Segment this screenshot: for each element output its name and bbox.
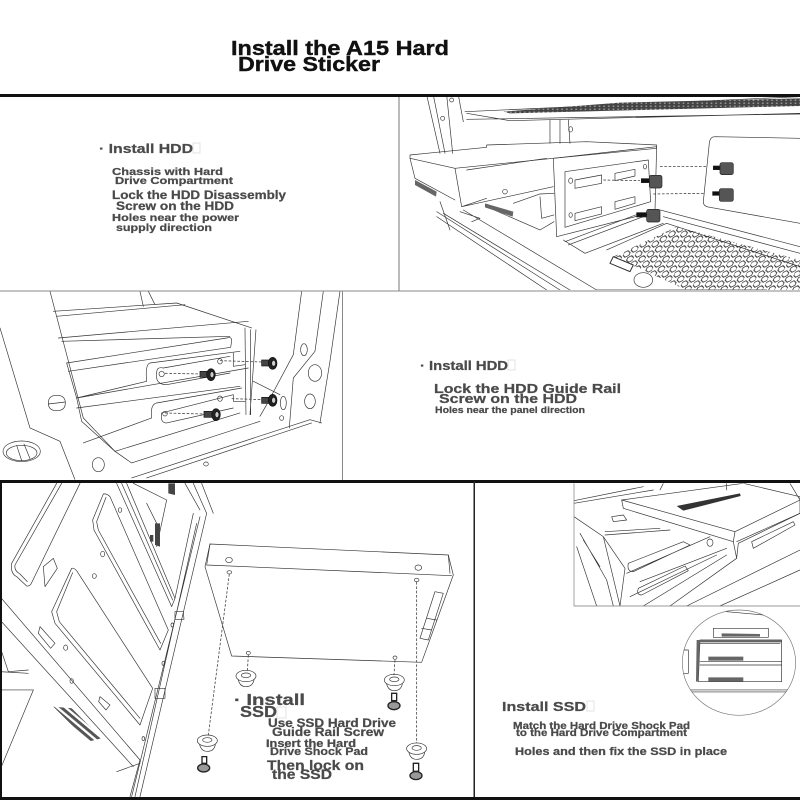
- SSD drive: [622, 483, 800, 558]
- text: fix SSD: Holes and then fix the SSD in place: [515, 746, 727, 758]
- dashed guides: [208, 574, 417, 743]
- text: lock on: the SSD: [272, 766, 332, 782]
- illustration: HDD rails with screws: [0, 291, 340, 480]
- thumb screws: [637, 163, 733, 222]
- text: holes: supply direction: [116, 222, 212, 234]
- heading: install HDD: · Install HDD: [420, 358, 508, 373]
- dashed guides: [165, 361, 263, 414]
- text: guide rail: Screw on the HDD: [439, 391, 577, 406]
- illustration: SSD with shock pads and screws: [197, 544, 453, 780]
- shock pads: [197, 670, 427, 759]
- text: guide rail screw: Guide Rail Screw: [272, 725, 385, 739]
- text: chassis: Chassis with Hard: [112, 166, 223, 178]
- screws: [198, 693, 422, 780]
- panel: install HDD step 2 text: [420, 358, 621, 416]
- frame: [574, 483, 800, 606]
- panel: install HDD step 1 text: [99, 141, 286, 234]
- text: chassis: [112, 166, 234, 187]
- text: lock on: [267, 757, 364, 782]
- text: holes panel direction: Holes near the panel direction: [435, 405, 585, 416]
- text: holes: [112, 212, 239, 234]
- dashed guides: [603, 167, 707, 194]
- text: lock screw: Lock the HDD Disassembly: [112, 188, 286, 202]
- text: guide rail screw: Use SSD Hard Drive: [268, 716, 396, 730]
- text: shock pad: Insert the Hard: [266, 738, 356, 750]
- illustration: HDD cage in chassis with thumb screws: [410, 95, 800, 290]
- text: guide rail: Lock the HDD Guide Rail: [434, 381, 621, 396]
- illustration: chassis side panel: [0, 483, 213, 797]
- text: match shock pad: [513, 721, 690, 739]
- connectors: [415, 180, 513, 217]
- text: chassis: Drive Compartment: [115, 175, 234, 187]
- text: guide rail screw: [268, 716, 396, 739]
- text: shock pad: [266, 738, 368, 758]
- hatched label: [53, 707, 102, 742]
- mesh band: [503, 98, 800, 113]
- illustration: SSD sliding into drive bay: [574, 483, 800, 715]
- heading: install SSD: · Install: [234, 692, 305, 709]
- text: shock pad: Drive Shock Pad: [270, 746, 368, 758]
- text: guide rail: [434, 381, 621, 406]
- title: Drive Sticker: [238, 54, 380, 76]
- heading: install SSD: Install SSD: [502, 699, 586, 714]
- text: lock screw: Screw on the HDD: [116, 199, 234, 213]
- title: [231, 38, 449, 76]
- screws: [200, 357, 277, 421]
- heading: install SSD: [234, 692, 305, 721]
- detail circle: [682, 610, 797, 715]
- hex mesh: [613, 227, 800, 290]
- text: holes: Holes near the power: [112, 212, 239, 224]
- heading: install HDD: · Install HDD: [99, 141, 193, 156]
- text: lock on: Then lock on: [267, 757, 364, 773]
- text: match shock pad: Match the Hard Drive Shock Pad: [513, 721, 690, 732]
- text: lock screw: [112, 188, 286, 213]
- text: match shock pad: to the Hard Drive Compartment: [516, 728, 688, 739]
- panel: install SSD step text: [234, 692, 396, 782]
- panel: install SSD right text: [502, 699, 727, 758]
- small parts: [150, 483, 175, 547]
- title: Install the A15 Hard: [231, 38, 449, 60]
- SSD body: [205, 544, 453, 662]
- heading: install SSD: SSD: [240, 704, 277, 721]
